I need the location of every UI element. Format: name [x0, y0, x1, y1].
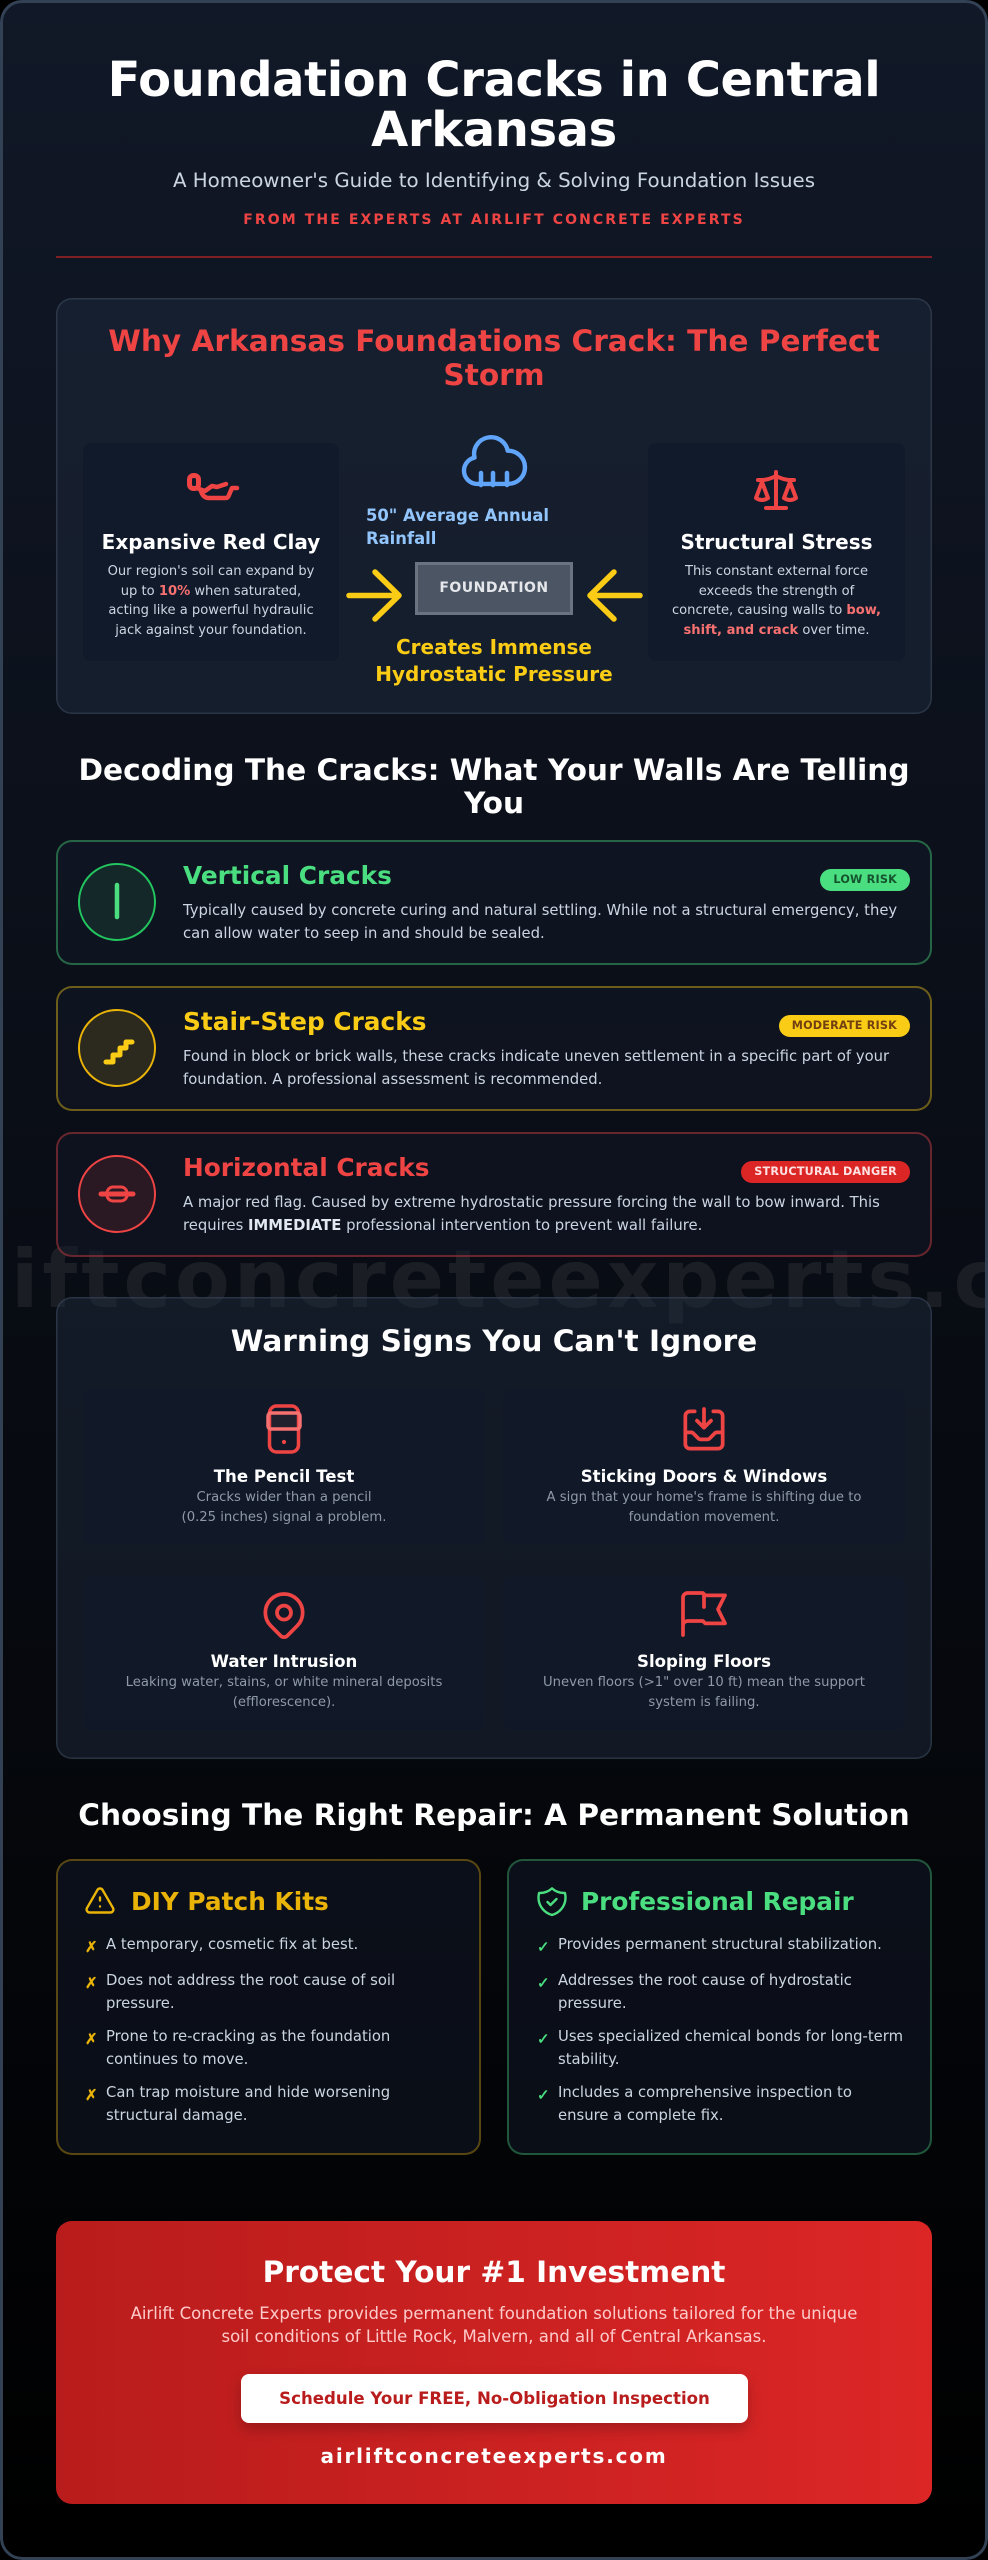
heading: expansive red clay: Expansive Red Clay [102, 530, 320, 554]
list: professional benefits: ✓ [537, 1938, 550, 1956]
website: airliftconcreteexperts.com [321, 2444, 667, 2468]
heading: perfect storm: Storm [443, 358, 545, 392]
text: vertical cracks [182, 902, 897, 942]
button: schedule inspection: Schedule Your FREE, No-Obligation Inspection [279, 2389, 710, 2408]
icon: scales [754, 470, 798, 510]
icon: stair crack [78, 1009, 156, 1087]
title: Arkansas [371, 102, 617, 158]
panel: warning signs [56, 1297, 932, 1759]
tagline: FROM THE EXPERTS AT AIRLIFT CONCRETE EXPERTS [243, 212, 745, 228]
arrow: right pressure [587, 569, 643, 622]
icon: oil can clay [187, 473, 240, 500]
icon: horizontal crack [78, 1155, 156, 1233]
heading: decoding the cracks [78, 752, 910, 820]
text: sloping floors: system is failing. [648, 1695, 760, 1710]
heading: DIY patch kits: DIY Patch Kits [131, 1887, 329, 1916]
list: DIY drawbacks: pressure. [106, 1994, 175, 2012]
text: vertical cracks: can allow water to seep in and should be sealed. [183, 924, 545, 942]
text: sloping floors [543, 1675, 865, 1710]
heading: choosing the right repair: Choosing The Right Repair: A Permanent Solution [78, 1798, 910, 1832]
list: professional benefits: Provides permanent structural stabilization. [558, 1936, 882, 1952]
list: DIY drawbacks: ✗ [85, 2086, 98, 2104]
foundation box [415, 562, 573, 615]
label: sloping floors: Sloping Floors [637, 1652, 771, 1671]
text: horizontal cracks: A major red flag. Caused by extreme hydrostatic pressure forcing the wall to bow inward. This [183, 1194, 880, 1210]
text: stress: concrete, causing walls to bow, [672, 603, 881, 618]
text: stress: This constant external force [685, 564, 868, 579]
panel: structural stress [648, 443, 905, 661]
text: clay: Our region's soil can expand by [108, 564, 314, 579]
arrow: left pressure [346, 569, 402, 622]
list: DIY drawbacks: ✗ [85, 1938, 98, 1956]
badge: low risk: LOW RISK [833, 873, 897, 886]
panel: call to action [56, 2221, 932, 2504]
panel: perfect storm [56, 298, 932, 714]
list: professional benefits [537, 1936, 903, 2124]
foundation box: FOUNDATION [439, 580, 549, 596]
list: DIY drawbacks: ✗ [85, 2030, 98, 2048]
text: pencil test: Cracks wider than a pencil [196, 1490, 372, 1505]
text: sticking doors [546, 1490, 861, 1525]
text: sloping floors: Uneven floors (>1" over 10 ft) mean the support [543, 1675, 865, 1690]
icon: rain cloud [462, 435, 528, 488]
heading: horizontal cracks: Horizontal Cracks [183, 1153, 429, 1182]
badge: structural danger [741, 1161, 910, 1183]
label: hydrostatic pressure [375, 634, 613, 686]
text: water intrusion: Leaking water, stains, or white mineral deposits [126, 1675, 442, 1690]
badge: structural danger: STRUCTURAL DANGER [754, 1165, 897, 1178]
text: clay: acting like a powerful hydraulic [108, 603, 314, 618]
heading: decoding the cracks: You [464, 786, 524, 820]
text: stair-step cracks: Found in block or brick walls, these cracks indicate uneven settlement in a specific part of your [183, 1048, 889, 1064]
list: professional benefits: Addresses the root cause of hydrostatic [558, 1972, 852, 1988]
list: professional benefits: Uses specialized chemical bonds for long-term [558, 2028, 903, 2044]
heading: structural stress: Structural Stress [680, 530, 873, 554]
subtitle: A Homeowner's Guide to Identifying & Solving Foundation Issues [173, 169, 815, 192]
card: horizontal cracks [56, 1132, 932, 1257]
label: rainfall [366, 506, 549, 548]
icon: warning triangle [85, 1887, 115, 1914]
text: stress [672, 564, 881, 638]
list: DIY drawbacks: Can trap moisture and hide worsening [106, 2084, 390, 2100]
heading: decoding the cracks: Decoding The Cracks: What Your Walls Are Telling [78, 752, 910, 786]
text: pencil test [182, 1490, 386, 1525]
icon: flag [681, 1591, 727, 1637]
panel: expansive red clay [83, 443, 339, 661]
text: horizontal cracks: requires IMMEDIATE professional intervention to prevent wall failure. [183, 1216, 702, 1234]
label: water intrusion: Water Intrusion [211, 1652, 357, 1671]
header [108, 52, 880, 228]
text: horizontal cracks [183, 1194, 880, 1234]
text: stress: exceeds the strength of [699, 584, 854, 599]
heading: protect your investment: Protect Your #1 Investment [263, 2255, 725, 2289]
sign: pencil test [83, 1389, 485, 1544]
heading: vertical cracks: Vertical Cracks [183, 861, 392, 890]
list: professional benefits: ✓ [537, 2030, 550, 2048]
list: professional benefits: ✓ [537, 1974, 550, 1992]
list: DIY drawbacks [85, 1936, 395, 2124]
text: stress: shift, and crack over time. [684, 623, 870, 638]
list: professional benefits: stability. [558, 2050, 619, 2068]
label: sticking doors: Sticking Doors & Windows [581, 1467, 827, 1486]
list: professional benefits: pressure. [558, 1994, 627, 2012]
icon: pencil [266, 1404, 302, 1454]
list: DIY drawbacks: structural damage. [106, 2106, 247, 2124]
label: rainfall: Rainfall [366, 528, 436, 548]
icon: shield check [537, 1887, 567, 1916]
text: clay: up to 10% when saturated, [121, 584, 301, 599]
label: pencil test: The Pencil Test [214, 1467, 354, 1486]
text: vertical cracks: Typically caused by concrete curing and natural settling. While not a structural emergency, they [183, 902, 897, 918]
text: stair-step cracks: foundation. A professional assessment is recommended. [183, 1070, 602, 1088]
text: pencil test: (0.25 inches) signal a problem. [182, 1510, 386, 1525]
text: clay: jack against your foundation. [115, 623, 307, 638]
sign: sloping floors [503, 1576, 905, 1730]
text: water intrusion [126, 1675, 442, 1710]
label: rainfall: 50" Average Annual [366, 506, 549, 524]
icon: map pin [263, 1592, 304, 1639]
list: DIY drawbacks: continues to move. [106, 2050, 248, 2068]
title [108, 52, 880, 158]
badge: moderate risk [779, 1015, 910, 1037]
label: hydrostatic pressure: Creates Immense [396, 634, 592, 658]
heading: perfect storm [108, 324, 880, 392]
icon: inbox [683, 1407, 725, 1450]
list: DIY drawbacks: Does not address the root cause of soil [106, 1972, 395, 1988]
panel: DIY patch kits [56, 1859, 481, 2155]
title: Foundation Cracks in Central [108, 52, 880, 108]
heading: perfect storm: Why Arkansas Foundations Crack: The Perfect [108, 324, 880, 358]
list: DIY drawbacks: ✗ [85, 1974, 98, 1992]
list: DIY drawbacks: Prone to re-cracking as the foundation [106, 2028, 390, 2044]
list: DIY drawbacks: A temporary, cosmetic fix at best. [106, 1936, 358, 1952]
icon: vertical crack [78, 863, 156, 941]
list: professional benefits: Includes a comprehensive inspection to [558, 2084, 852, 2100]
text: call to action [130, 2304, 857, 2346]
heading: professional repair: Professional Repair [581, 1887, 854, 1916]
text: water intrusion: (efflorescence). [233, 1695, 335, 1710]
text: sticking doors: A sign that your home's frame is shifting due to [547, 1490, 861, 1505]
sign: sticking doors [503, 1389, 905, 1544]
text: clay [108, 564, 314, 638]
text: stair-step cracks [183, 1048, 890, 1088]
heading: warning signs: Warning Signs You Can't Ignore [231, 1324, 757, 1358]
label: hydrostatic pressure: Hydrostatic Pressure [375, 662, 613, 686]
button: schedule inspection [241, 2374, 748, 2423]
text: sticking doors: foundation movement. [629, 1510, 779, 1525]
list: professional benefits: ensure a complete fix. [558, 2106, 724, 2124]
text: call to action: soil conditions of Little Rock, Malvern, and all of Central Arkansas. [221, 2326, 767, 2346]
card: vertical cracks [56, 840, 932, 965]
list: professional benefits: ✓ [537, 2086, 550, 2104]
text: call to action: Airlift Concrete Experts provides permanent foundation solutions tailored for the unique [131, 2304, 857, 2322]
panel: professional repair [507, 1859, 932, 2155]
sign: water intrusion [83, 1576, 485, 1730]
card: stair-step cracks [56, 986, 932, 1111]
heading: stair-step cracks: Stair-Step Cracks [183, 1007, 426, 1036]
badge: low risk [820, 869, 910, 891]
badge: moderate risk: MODERATE RISK [792, 1019, 897, 1032]
